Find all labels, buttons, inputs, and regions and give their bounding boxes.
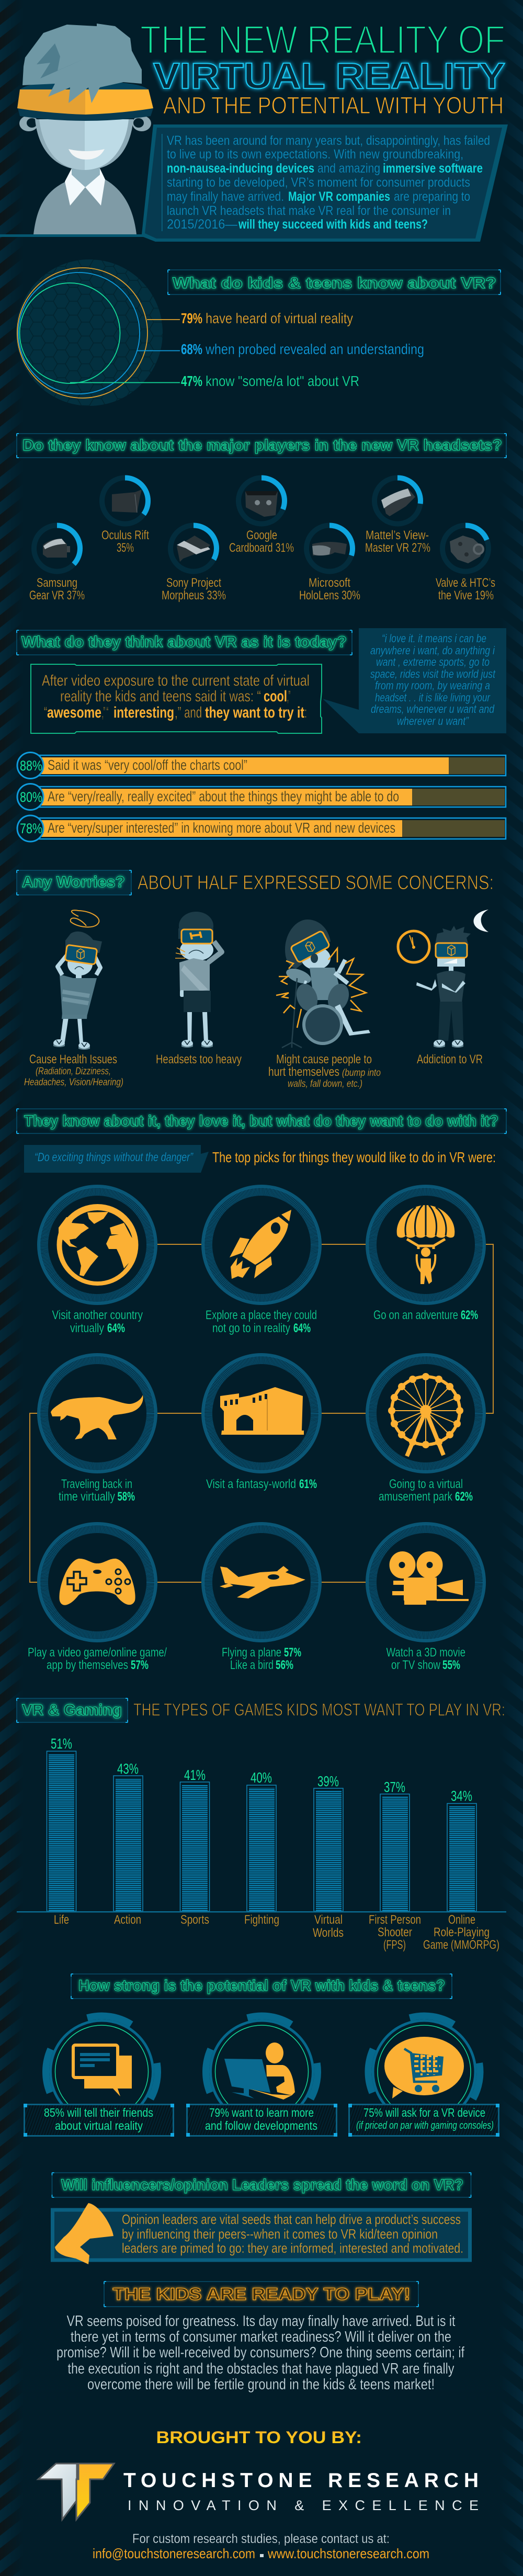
- label: Vive: [436, 576, 495, 603]
- heading: what do they want to do: They know about it, they love it, but what do they want to do with it?: [24, 1113, 498, 1130]
- label: View-Master VR: Mattel’s View-: [366, 528, 429, 542]
- heading: what do kids and teens know: [168, 270, 501, 294]
- label: addiction: Addiction to VR: [417, 1052, 483, 1066]
- callout: teen quote: from my room, by wearing a: [375, 679, 490, 692]
- label: Oculus Rift: [101, 528, 149, 555]
- label: Oculus Rift: 35%: [117, 541, 134, 555]
- card: tell their friends: [24, 1999, 175, 2144]
- activity: visit another country: Visit another country: [52, 1308, 143, 1322]
- panel: after video exposure: ,” and: [175, 704, 202, 721]
- bar chart: game types: 40%: [251, 1769, 272, 1786]
- bar chart: game types: Life: [54, 1913, 69, 1927]
- activity: play a video game: [28, 1524, 167, 1672]
- activity: visit another country: 64%: [107, 1321, 125, 1335]
- stats: awareness percentages: 47%: [181, 373, 202, 389]
- label: Microsoft HoloLens: Microsoft: [309, 576, 350, 590]
- activity: explore a place: 64%: [293, 1321, 311, 1335]
- panel: after video exposure: After video exposure to the current state of virtual: [42, 672, 310, 689]
- heading: influencers: [52, 2173, 471, 2197]
- card: tell their friends: 85% will tell their friends: [44, 2106, 153, 2119]
- bar chart: game types: Online: [448, 1913, 475, 1927]
- label: headsets too heavy: Headsets too heavy: [156, 1052, 242, 1066]
- illustration: dizzy teen with hands on headset: [53, 910, 102, 1050]
- heading: what do kids and teens know: What do kids & teens know about VR?: [173, 275, 496, 292]
- activity: traveling back in time: Traveling back in: [61, 1477, 132, 1491]
- callout: do exciting things quote: [24, 1145, 209, 1173]
- label: might cause injury: walls, fall down, etc.): [288, 1079, 362, 1090]
- label: View-Master VR: Master VR 27%: [365, 541, 430, 555]
- heading: VR and gaming: VR & Gaming: [22, 1701, 122, 1719]
- activity: virtual amusement park: amusement park: [379, 1490, 453, 1504]
- activity: explore a place: Explore a place they could: [206, 1308, 317, 1322]
- illustration: teen with heavy headset: [175, 912, 222, 1048]
- logo: Touchstone Research: TOUCHSTONE RESEARCH: [123, 2469, 479, 2492]
- bar chart: game types: 37%: [384, 1779, 405, 1795]
- stats: awareness percentages: know "some/a lot" about VR: [206, 373, 359, 389]
- panel: intro text: may finally have arrived.: [167, 189, 284, 204]
- bar: 80 percent very excited: [17, 784, 506, 810]
- heading: potential with kids and teens: How strong is the potential of VR with kids & teens?: [78, 1977, 445, 1994]
- panel: after video exposure: ,”: [287, 688, 290, 705]
- activity: go on an adventure: 62%: [461, 1308, 478, 1322]
- activity: visit a fantasy world: 61%: [299, 1477, 317, 1491]
- callout: do exciting things quote: “Do exciting things without the danger”: [35, 1150, 194, 1164]
- card: want to learn more: [186, 1999, 337, 2144]
- activity: traveling back in time: [39, 1355, 156, 1504]
- activity: visit another country: [39, 1186, 156, 1335]
- bar chart: game types: [17, 1735, 506, 1952]
- panel: intro text: starting to be developed, VR’s moment for consumer products: [167, 175, 470, 190]
- activity: virtual amusement park: 62%: [455, 1490, 473, 1504]
- text: conclusion: overcome there will be fertile ground in the kids & teens market!: [87, 2376, 435, 2393]
- panel: intro text: to live up to its own expectations. With new groundbreaking,: [167, 147, 463, 162]
- panel: after video exposure: they want to try it: [205, 704, 304, 721]
- bar chart: game types: Sports: [180, 1913, 209, 1927]
- panel: intro text: immersive software: [383, 161, 483, 176]
- panel: intro text: will they succeed with kids and teens?: [238, 217, 428, 232]
- label: Google Cardboard: Google: [246, 528, 277, 542]
- panel: opinion leaders: [52, 2203, 470, 2264]
- label: might cause injury: hurt themselves: [268, 1065, 339, 1079]
- label: Samsung Gear VR: Gear VR 37%: [29, 588, 85, 603]
- card: ask for a VR device: 75% will ask for a VR device: [363, 2106, 485, 2119]
- illustration: teen addicted to VR with clock and moon: [398, 910, 488, 1048]
- label: Google Cardboard: Cardboard 31%: [229, 541, 294, 555]
- panel: intro text: 2015/2016—: [167, 217, 237, 232]
- label: health issues: Cause Health Issues: [29, 1052, 117, 1066]
- panel: after video exposure: ,” “: [102, 704, 108, 721]
- heading: kids ready to play: THE KIDS ARE READY TO PLAY!: [113, 2285, 410, 2303]
- card: want to learn more: and follow developments: [205, 2119, 317, 2132]
- label: might cause injury: (bump into: [342, 1068, 381, 1079]
- callout: teen quote: anywhere i want, do anything i: [370, 644, 495, 657]
- bar: 88 percent very cool: [17, 752, 506, 778]
- activity: traveling back in time: time virtually: [59, 1490, 115, 1504]
- activity: flying a plane: [203, 1524, 320, 1672]
- heading: what do they think today: [17, 630, 352, 655]
- heading: major players: Do they know about the major players in the new VR headsets?: [22, 437, 502, 454]
- heading: potential with kids and teens: [71, 1974, 452, 1999]
- label: Oculus Rift: Oculus Rift: [101, 528, 149, 542]
- callout: teen quote: “i love it. it means i can be: [382, 632, 486, 645]
- bar chart: game types: (FPS): [383, 1938, 406, 1952]
- icon: Sony Project Morpheus: [177, 536, 210, 562]
- activity: visit another country: virtually: [70, 1321, 104, 1335]
- label: Samsung Gear VR: [29, 576, 85, 603]
- illustration: smiling person wearing VR headset: [17, 24, 153, 234]
- activity: visit a fantasy world: [203, 1355, 320, 1491]
- panel: intro text: launch VR headsets that make VR real for the consumer in: [167, 203, 451, 218]
- panel: after video exposure: cool: [264, 688, 287, 705]
- panel: after video exposure: reality the kids and teens said it was: “: [60, 688, 261, 705]
- bar chart: game types: First Person: [369, 1913, 421, 1927]
- card: ask for a VR device: [348, 1999, 499, 2144]
- bar chart: game types: 43%: [117, 1761, 139, 1777]
- bar chart: game types: 51%: [51, 1735, 72, 1752]
- callout: teen quote: space, rides visit the world just: [370, 667, 496, 680]
- card: tell their friends: about virtual reality: [55, 2119, 143, 2132]
- label: might cause injury: Might cause people to: [276, 1052, 372, 1066]
- callout: teen quote: want , extreme sports, go to: [376, 655, 490, 668]
- heading: brought to you by: BROUGHT TO YOU BY:: [156, 2428, 362, 2447]
- label: health issues: Headaches, Vision/Hearing): [24, 1077, 123, 1088]
- panel: after video exposure: :: [304, 704, 307, 721]
- callout: teen quote: wherever u want”: [397, 714, 469, 728]
- icon: Microsoft HoloLens: [312, 542, 347, 555]
- label: View-Master VR: [365, 528, 430, 555]
- bar chart: game types: 41%: [184, 1767, 206, 1783]
- activity: flying a plane: Like a bird: [230, 1658, 274, 1672]
- illustration: teen crashing into drum kit: [276, 920, 370, 1048]
- logo: Touchstone Research: [38, 2464, 479, 2520]
- activity: virtual amusement park: Going to a virtual: [389, 1477, 463, 1491]
- callout: teen quote: [323, 628, 506, 733]
- panel: after video exposure: “: [44, 704, 47, 721]
- label: health issues: [24, 1052, 123, 1088]
- stats: awareness percentages: [181, 310, 424, 389]
- bar: 78 percent very interested: 78%: [20, 821, 42, 836]
- heading: influencers: Will influencers/opinion Leaders spread the word on VR?: [61, 2176, 463, 2194]
- panel: intro text: [0, 124, 508, 242]
- activity: flying a plane: 56%: [276, 1658, 293, 1672]
- panel: after video exposure: interesting: [113, 704, 174, 721]
- label: Samsung Gear VR: Samsung: [37, 576, 77, 590]
- text: conclusion: [56, 2313, 465, 2393]
- callout: teen quote: dreams, whenever u want and: [371, 702, 495, 716]
- bar: 78 percent very interested: [17, 815, 506, 842]
- stats: awareness percentages: have heard of virtual reality: [206, 310, 353, 326]
- activity: traveling back in time: 58%: [117, 1490, 135, 1504]
- connector lines: [30, 1244, 493, 1582]
- panel: intro text: Major VR companies: [288, 189, 390, 204]
- activity: visit a fantasy world: Visit a fantasy-world: [206, 1477, 296, 1491]
- label: Sony Project Morpheus: [162, 576, 226, 603]
- label: Microsoft HoloLens: [299, 576, 360, 603]
- icon: Oculus Rift: [112, 490, 142, 513]
- panel: after video exposure: awesome: [47, 704, 101, 721]
- chart: nested awareness circles: [16, 259, 180, 406]
- bar chart: game types: Virtual: [314, 1913, 343, 1927]
- panel: intro text: non-nausea-inducing devices: [167, 161, 314, 176]
- bar: 88 percent very cool: Said it was “very cool/off the charts cool”: [48, 757, 247, 773]
- bar chart: game types: Fighting: [244, 1913, 279, 1927]
- stats: awareness percentages: 68%: [181, 341, 202, 357]
- text: contact details: For custom research studies, please contact us at:: [132, 2532, 390, 2546]
- text: contact details: info@touchstoneresearch.com: [93, 2546, 255, 2561]
- heading: what do they want to do: [17, 1109, 506, 1133]
- bar chart: game types: 34%: [451, 1788, 472, 1804]
- logo: Touchstone Research: INNOVATION & EXCELLENCE: [128, 2498, 479, 2513]
- heading: what do they think today: What do they think about VR as it is today?: [21, 633, 347, 651]
- icon: Samsung Gear VR: [43, 539, 70, 558]
- title: VIRTUAL REALITY: [153, 55, 505, 96]
- activity: play a video game: 57%: [131, 1658, 149, 1672]
- stats: awareness percentages: when probed revealed an understanding: [205, 341, 424, 357]
- activity: go on an adventure: Go on an adventure: [373, 1308, 458, 1322]
- activity: play a video game: app by themselves: [47, 1658, 128, 1672]
- label: Vive: the Vive 19%: [438, 588, 494, 603]
- bar chart: game types: Shooter: [378, 1925, 412, 1939]
- activity: play a video game: Play a video game/online game/: [28, 1646, 167, 1660]
- title: [140, 18, 505, 119]
- heading: any worries: [17, 870, 131, 895]
- activity: watch a 3D movie: Watch a 3D movie: [386, 1646, 465, 1660]
- activity: watch a 3D movie: 55%: [442, 1658, 460, 1672]
- icon: View-Master VR: [381, 489, 415, 516]
- activity: explore a place: [203, 1186, 320, 1335]
- heading: major players: [17, 434, 506, 458]
- activity: explore a place: not go to in reality: [212, 1321, 290, 1335]
- label: health issues: (Radiation, Dizziness,: [36, 1066, 111, 1077]
- activity: go on an adventure: [367, 1186, 484, 1322]
- heading: kids ready to play: [104, 2282, 418, 2307]
- bar: 80 percent very excited: Are “very/really, really excited” about the things they might be able to do: [48, 788, 399, 804]
- bar chart: game types: Action: [114, 1913, 141, 1927]
- heading: VR and gaming: [17, 1698, 128, 1722]
- label: Sony Project Morpheus: Morpheus 33%: [162, 588, 226, 603]
- bar: 80 percent very excited: 80%: [20, 789, 42, 805]
- heading: any worries: Any Worries?: [22, 873, 125, 891]
- text: contact details: www.touchstoneresearch.com: [267, 2546, 429, 2561]
- panel: after video exposure: [31, 664, 322, 733]
- activity: watch a 3D movie: [367, 1524, 484, 1672]
- label: Sony Project Morpheus: Sony Project: [166, 576, 221, 590]
- icon: Google Cardboard: [245, 491, 278, 517]
- bar chart: game types: 39%: [317, 1773, 339, 1789]
- activity: virtual amusement park: [367, 1355, 484, 1504]
- bar: 88 percent very cool: 88%: [20, 758, 42, 774]
- label: Google Cardboard: [229, 528, 294, 555]
- activity: watch a 3D movie: or TV show: [391, 1658, 441, 1672]
- label: Microsoft HoloLens: HoloLens 30%: [299, 588, 360, 603]
- stats: awareness percentages: 79%: [181, 310, 202, 326]
- panel: opinion leaders: by influencing their peers--when it comes to VR kid/teen opinion: [122, 2226, 438, 2242]
- text: contact details: [93, 2532, 429, 2561]
- panel: intro text: are preparing to: [394, 189, 470, 204]
- bar: 78 percent very interested: Are “very/super interested” in knowing more about VR and new devices: [48, 820, 395, 836]
- callout: teen quote: headset . . it is like living your: [375, 691, 491, 704]
- chart: headset awareness rings: [29, 478, 495, 603]
- bar chart: game types: Worlds: [313, 1926, 344, 1940]
- card: want to learn more: 79% want to learn more: [209, 2106, 314, 2119]
- icon: HTC Vive: [450, 536, 484, 563]
- icon: megaphone: [55, 2203, 113, 2264]
- activity: flying a plane: 57%: [284, 1646, 301, 1660]
- label: Vive: Valve & HTC’s: [436, 576, 495, 590]
- panel: intro text: and amazing: [317, 161, 380, 176]
- label: might cause injury: [268, 1052, 381, 1090]
- activity: flying a plane: Flying a plane: [222, 1646, 281, 1660]
- bar chart: game types: Role-Playing: [434, 1925, 490, 1939]
